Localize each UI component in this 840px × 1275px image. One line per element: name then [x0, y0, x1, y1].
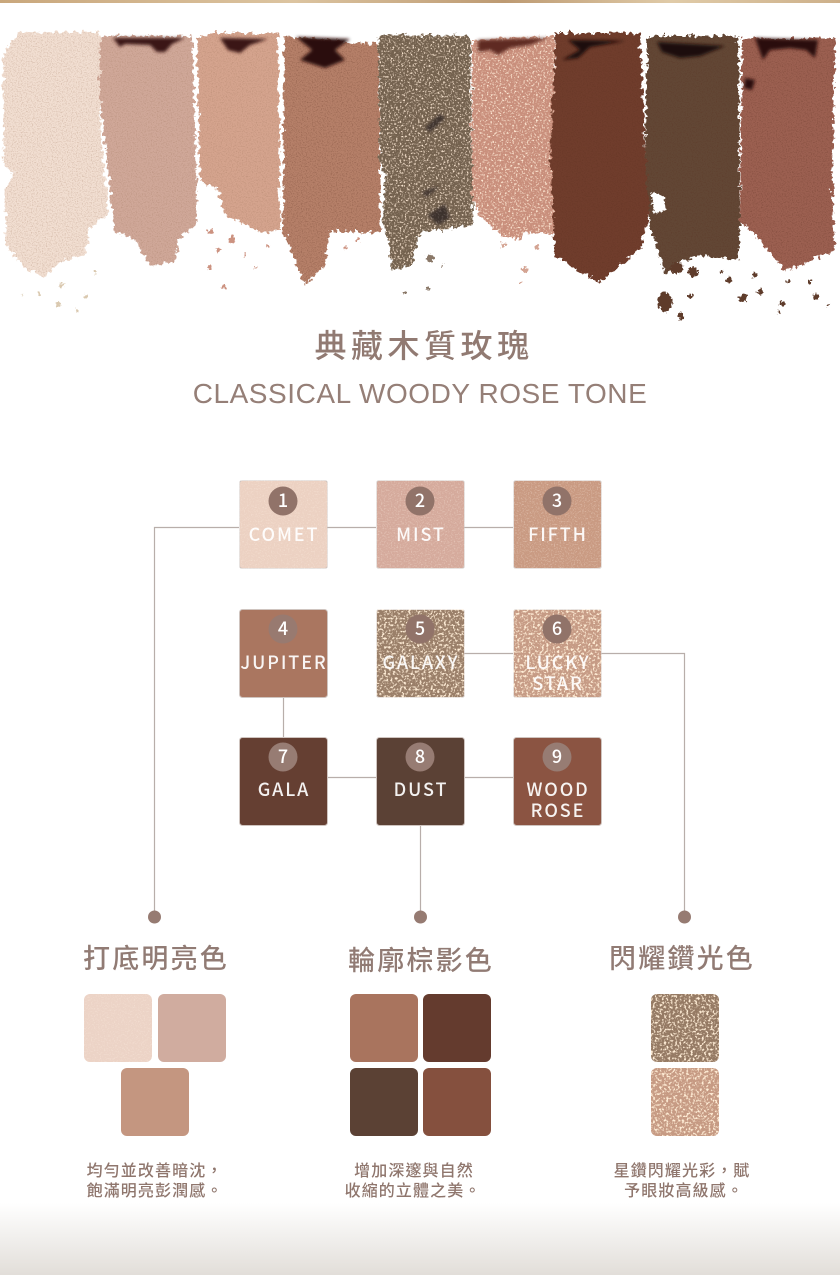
description: 增加深邃與自然 [354, 1157, 474, 1181]
description: 予眼妝高級感。 [624, 1177, 744, 1201]
subtitle: CLASSICAL WOODY ROSE TONE [193, 378, 647, 409]
shade 5 GALAXY: 5 [415, 615, 425, 641]
description: 均勻並改善暗沈， [87, 1157, 223, 1181]
column: base brightening [83, 937, 229, 1201]
smear 8 [645, 36, 740, 275]
shade grid [240, 480, 602, 826]
smear 3 [197, 33, 280, 233]
heading: 輪廓棕影色 [348, 939, 494, 978]
shade 8 DUST: DUST [394, 776, 448, 802]
shade 3 FIFTH [514, 480, 602, 568]
bottom fade [0, 1203, 840, 1275]
smear 5 [378, 35, 473, 270]
top gold band [0, 0, 840, 3]
column: contour [345, 939, 494, 1201]
shade 4 JUPITER: JUPITER [240, 649, 328, 675]
shade 6 LUCKY STAR: STAR [532, 670, 584, 696]
smear 9 [740, 38, 835, 270]
smear 1 [3, 32, 108, 277]
title: 典藏木質玫瑰 [314, 321, 534, 367]
smear 7 [550, 33, 650, 282]
smear 4 [283, 36, 380, 285]
smear 2 [100, 36, 197, 265]
description [345, 1157, 481, 1201]
shade 6 LUCKY STAR: LUCKY [525, 649, 591, 675]
shade 5 GALAXY: GALAXY [382, 649, 460, 675]
shade 7 GALA [240, 738, 328, 826]
smear 6 [472, 36, 557, 240]
shade 7 GALA: 7 [278, 743, 288, 769]
column: shimmer [609, 937, 755, 1201]
swatches [84, 994, 226, 1136]
shade 7 GALA: GALA [258, 776, 310, 802]
shade 6 LUCKY STAR [514, 610, 602, 698]
description: 收縮的立體之美。 [345, 1177, 481, 1201]
powder crumbs [21, 230, 830, 320]
shade 2 MIST: MIST [396, 521, 446, 547]
shade 2 MIST: 2 [415, 487, 425, 513]
swatches [651, 994, 719, 1136]
shade 1 COMET: 1 [278, 487, 288, 513]
shade 9 WOOD ROSE: ROSE [531, 797, 585, 823]
shade 9 WOOD ROSE [514, 738, 602, 826]
shade 1 COMET [240, 480, 328, 568]
shade 9 WOOD ROSE: 9 [552, 743, 562, 769]
connector lines [154, 528, 684, 917]
shade 3 FIFTH: FIFTH [528, 521, 588, 547]
shade 6 LUCKY STAR: 6 [552, 615, 562, 641]
shade 8 DUST: 8 [415, 743, 425, 769]
swatches [350, 994, 491, 1136]
shade 5 GALAXY [376, 610, 464, 698]
description: 飽滿明亮彭潤感。 [87, 1177, 223, 1201]
shade 9 WOOD ROSE: WOOD [526, 776, 590, 802]
description: 星鑽閃耀光彩，賦 [614, 1157, 750, 1181]
eyeshadow smear swatches [3, 32, 835, 320]
shade 4 JUPITER: 4 [278, 615, 288, 641]
shade 1 COMET: COMET [249, 521, 319, 547]
shade 3 FIFTH: 3 [552, 487, 562, 513]
description [614, 1157, 750, 1201]
heading: 打底明亮色 [83, 937, 229, 976]
connector dots [148, 910, 691, 924]
shade 2 MIST [376, 480, 464, 568]
shade 8 DUST [376, 738, 464, 826]
description [87, 1157, 223, 1201]
heading: 閃耀鑽光色 [609, 937, 755, 976]
shade 4 JUPITER [240, 610, 328, 698]
